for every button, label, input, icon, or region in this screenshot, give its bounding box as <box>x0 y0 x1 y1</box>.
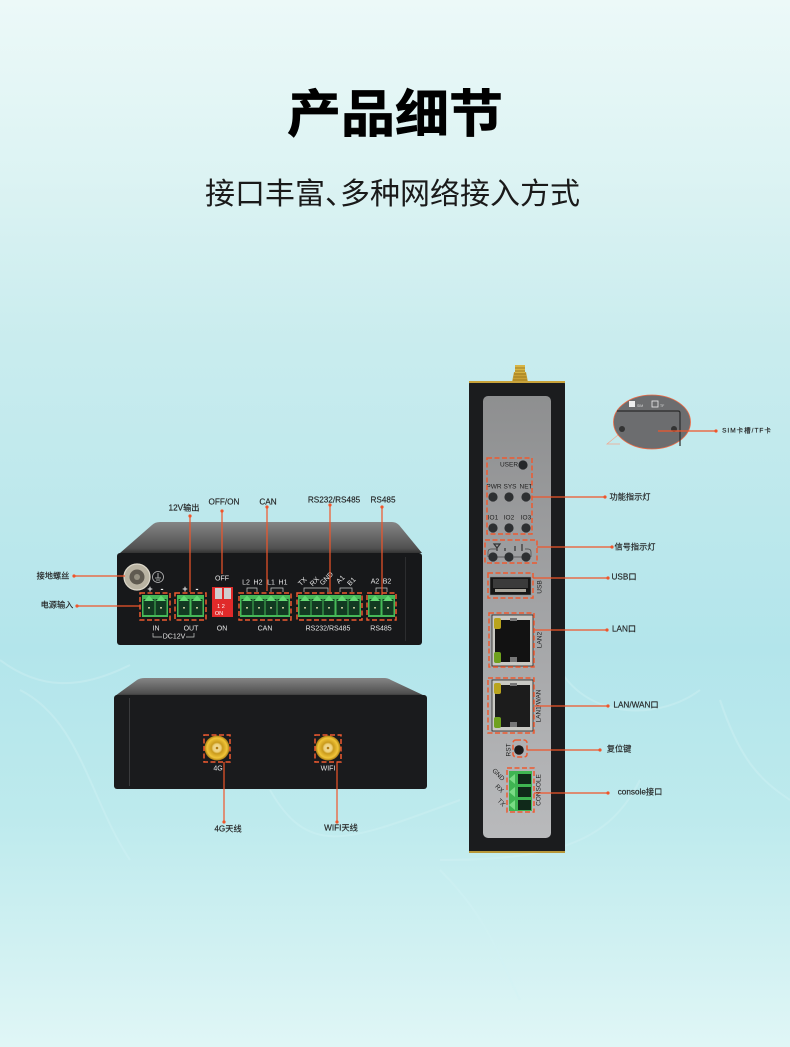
device top cover <box>120 522 422 553</box>
inset: SIM/TF card slot <box>607 395 690 449</box>
ground symbol <box>152 572 164 582</box>
reset button: RST <box>506 743 512 756</box>
plus minus marks: - <box>196 584 198 594</box>
title: 产品细节 <box>287 74 503 148</box>
callout: RS232/RS485 <box>308 496 361 592</box>
terminal: 12V output <box>175 593 206 620</box>
LAN2 port <box>489 613 544 667</box>
callout: 电源输入: 电源输入 <box>41 600 73 610</box>
callout: CAN: CAN <box>259 498 277 506</box>
LAN1/WAN port: LAN1/WAN <box>536 689 542 722</box>
function indicator LEDs <box>486 458 533 534</box>
callout: OFF/ON <box>209 498 240 574</box>
terminal: CAN <box>239 593 291 620</box>
inset: SIM/TF card slot: TF <box>660 404 664 408</box>
callout: WIFI天线: WIFI天线 <box>324 822 358 832</box>
callout: LAN/WAN口: LAN/WAN口 <box>613 700 659 710</box>
callout: LAN口: LAN口 <box>612 624 636 634</box>
callout: SIM卡槽/TF卡 <box>658 426 772 434</box>
inset: SIM/TF card slot: SIM <box>637 404 643 408</box>
silkscreen labels: RS485 <box>370 626 392 632</box>
console terminal: GND <box>490 767 506 783</box>
callout: RS485 <box>370 496 396 595</box>
DIP switch: 1 2 <box>217 604 225 610</box>
device: antenna side view <box>114 678 427 789</box>
CAN pin labels <box>242 580 288 592</box>
device front face <box>117 553 422 645</box>
plus minus marks <box>147 584 198 594</box>
device: vertical front view <box>469 365 565 853</box>
silkscreen labels: ON <box>217 626 227 632</box>
LAN2 port: LAN2 <box>536 631 544 648</box>
callout: USB口: USB口 <box>611 572 637 582</box>
plus minus marks: - <box>160 584 164 594</box>
callout: RS232/RS485: RS232/RS485 <box>308 496 361 504</box>
CAN pin labels: H1 <box>279 580 288 586</box>
plus minus marks: + <box>182 584 188 594</box>
DIP switch <box>212 587 233 617</box>
callout: 电源输入 <box>41 600 140 610</box>
function indicator LEDs: PWR <box>486 484 502 490</box>
RS232 pin labels: GND <box>319 571 335 587</box>
silkscreen labels <box>152 626 392 640</box>
reset button <box>506 740 527 757</box>
silkscreen labels: OUT <box>184 626 199 632</box>
silkscreen labels: DC12V <box>163 634 186 640</box>
callout: 4G天线: 4G天线 <box>214 824 242 834</box>
device: rear connector view <box>117 522 422 645</box>
RS232 pin labels: A1 <box>335 574 347 586</box>
USB port <box>488 573 544 598</box>
callout: LAN口 <box>534 624 636 634</box>
plus minus marks: + <box>147 584 153 594</box>
callout: 接地螺丝: 接地螺丝 <box>37 570 69 580</box>
function indicator LEDs: IO2 <box>504 514 515 522</box>
background light swirls <box>0 660 790 1000</box>
function indicator LEDs: NET <box>520 484 533 490</box>
ground screw <box>124 564 150 590</box>
callout: 功能指示灯: 功能指示灯 <box>610 492 650 502</box>
connector: 4G SMA <box>204 735 230 762</box>
CAN pin labels: L1 <box>267 580 275 586</box>
RS485 pin labels <box>371 578 391 592</box>
device top cover <box>115 678 425 696</box>
LAN1/WAN port <box>488 678 542 733</box>
CAN pin labels: H2 <box>254 580 263 586</box>
callout: 复位键 <box>527 744 631 754</box>
device: antenna side view: 4G <box>213 766 223 772</box>
device face <box>114 695 427 789</box>
RS232 pin labels: B1 <box>346 576 358 588</box>
RS485 pin labels: B2 <box>383 578 391 586</box>
RS485 pin labels: A2 <box>371 578 379 586</box>
silkscreen labels: CAN <box>258 626 272 632</box>
signal indicator LEDs <box>485 540 537 563</box>
callout: 复位键: 复位键 <box>607 744 631 754</box>
function indicator LEDs: USER <box>500 462 518 468</box>
callout: 12V输出 <box>169 502 199 592</box>
RS232 pin labels: RX <box>309 576 321 588</box>
USB port: USB <box>536 580 544 594</box>
callout: SIM卡槽/TF卡: SIM卡槽/TF卡 <box>722 426 772 434</box>
callout: 信号指示灯 <box>537 542 655 552</box>
RS232 pin labels: TX <box>297 576 309 588</box>
terminal: RS232/RS485 <box>297 593 362 620</box>
callout: USB口 <box>533 572 637 582</box>
RS232 pin labels <box>297 571 358 592</box>
callout: 4G天线 <box>214 762 242 834</box>
subtitle: 接口丰富、多种网络接入方式 <box>205 169 580 213</box>
device: antenna side view: WIFI <box>321 766 335 772</box>
device: rear connector view: OFF <box>215 576 229 582</box>
callout: RS485: RS485 <box>370 496 396 504</box>
antenna connector <box>512 365 528 382</box>
terminal: power input <box>140 593 170 620</box>
callout: 接地螺丝 <box>37 570 125 580</box>
function indicator LEDs: IO3 <box>521 514 532 522</box>
callout: 信号指示灯: 信号指示灯 <box>615 542 655 552</box>
callout: CAN <box>259 498 277 591</box>
device body <box>469 382 565 853</box>
DIP switch: ON <box>215 611 223 617</box>
callout: WIFI天线 <box>324 762 358 832</box>
function indicator LEDs: SYS <box>503 484 517 490</box>
callout: OFF/ON: OFF/ON <box>209 498 240 506</box>
front panel <box>483 396 551 838</box>
console terminal: TX <box>496 798 507 809</box>
terminal: RS485 <box>367 593 396 620</box>
silkscreen labels: RS232/RS485 <box>306 626 350 632</box>
CAN pin labels: L2 <box>242 580 250 586</box>
console terminal: RX <box>493 783 505 795</box>
callout: LAN/WAN口 <box>534 700 659 710</box>
console terminal <box>490 767 542 812</box>
callout: console接口 <box>534 786 662 796</box>
console terminal: CONSOLE <box>536 773 542 806</box>
function indicator LEDs: IO1 <box>488 514 499 522</box>
silkscreen labels: IN <box>152 626 160 632</box>
connector: WIFI SMA <box>315 735 341 762</box>
callout: console接口: console接口 <box>618 786 662 796</box>
callout: 功能指示灯 <box>532 492 650 502</box>
callout: 12V输出: 12V输出 <box>169 502 199 512</box>
